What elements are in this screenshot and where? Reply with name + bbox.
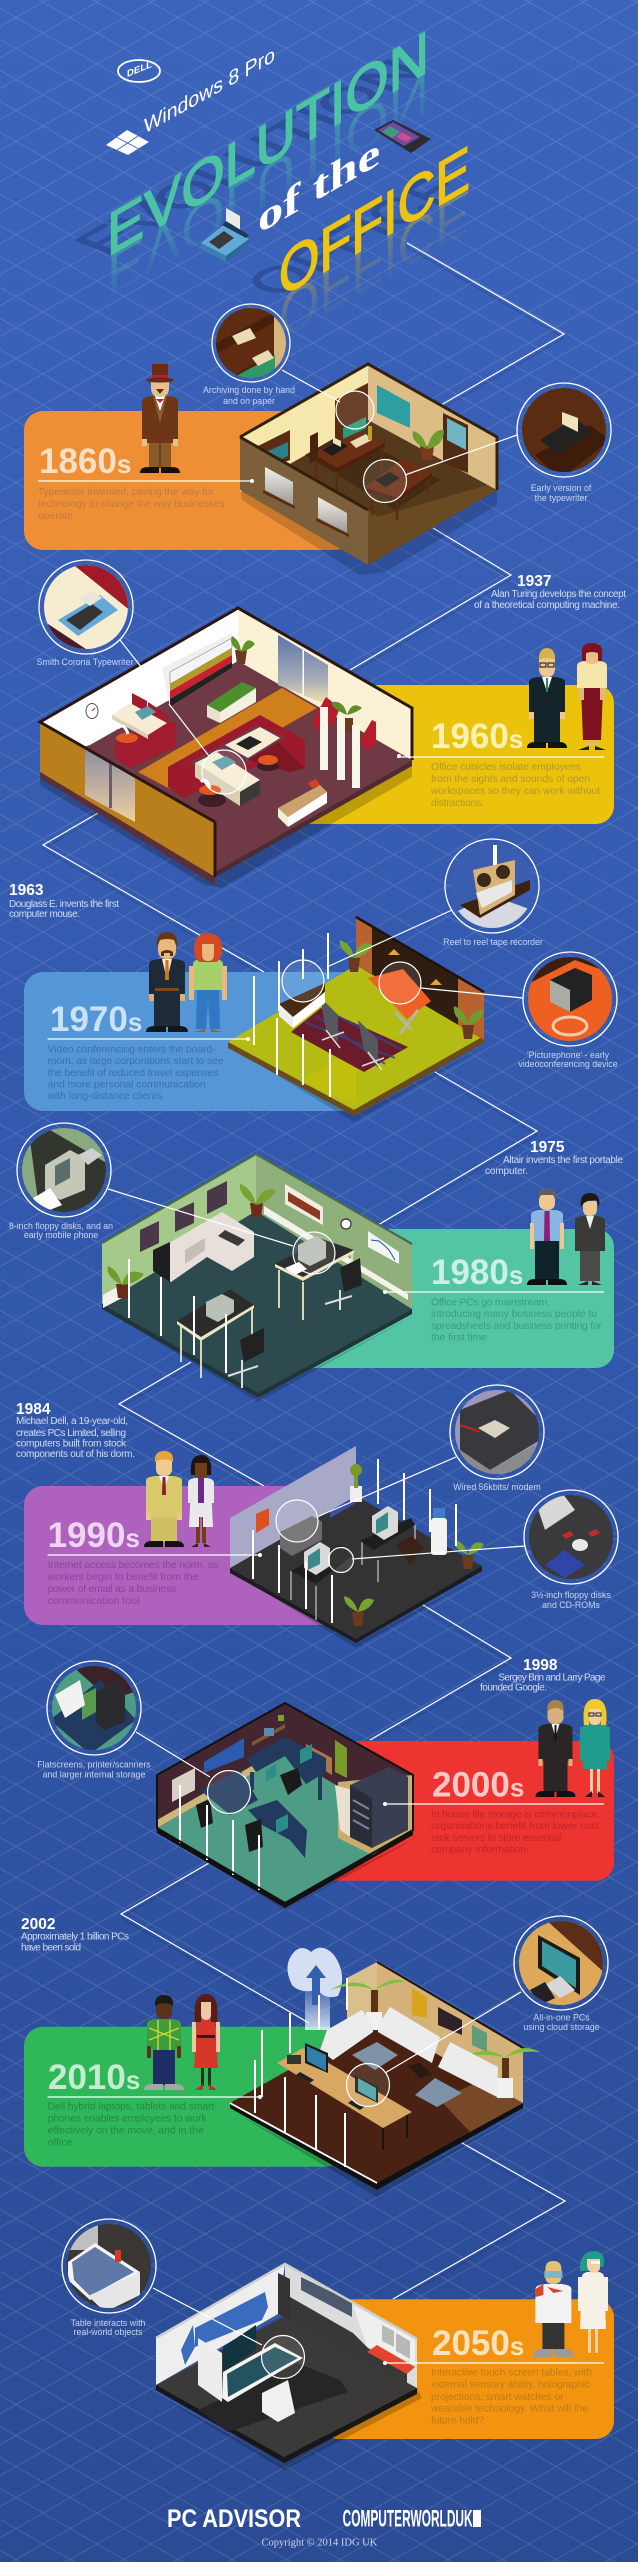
era description: office.	[48, 2137, 75, 2148]
shelf and plant	[252, 1715, 347, 1778]
timeline pointer: 1960s	[397, 754, 604, 758]
caption: Archiving done by hand	[203, 385, 295, 395]
figure: 1990s woman	[188, 1455, 214, 1547]
caption	[37, 1760, 151, 1780]
note: 1963: Douglass E. invents the first	[9, 899, 119, 910]
note: 1963: computer mouse.	[9, 909, 80, 920]
glass posts	[128, 1259, 227, 1373]
figure: 2000s woman	[580, 1699, 610, 1797]
palms	[330, 1980, 540, 2098]
era description: effectively on the move, and in the	[48, 2125, 204, 2136]
note: 1984	[16, 1401, 135, 1460]
icon: typewriter	[201, 208, 249, 262]
era description	[48, 2101, 218, 2148]
era description	[431, 1810, 600, 1856]
caption: and larger internal storage	[43, 1770, 145, 1780]
panel: 1860s	[24, 411, 354, 550]
note: 1984: components out of his dorm.	[16, 1449, 135, 1460]
note: 2002: 2002	[21, 1916, 55, 1933]
plants	[340, 940, 484, 1039]
note: 1998	[480, 1657, 606, 1694]
media cabinet	[279, 983, 325, 1028]
copier	[153, 1212, 254, 1282]
era description: power of email as a business	[48, 1584, 176, 1595]
caption: early mobile phone	[24, 1230, 98, 1240]
callout: floppy and mobile	[9, 1123, 113, 1240]
note: 2002: have been sold	[21, 1943, 81, 1954]
era description: technology to change the way businesses	[38, 499, 225, 510]
caption: Wired 56kbits/ modem	[453, 1482, 541, 1492]
cubicle middle	[168, 715, 305, 807]
plants	[344, 1464, 484, 1626]
year 2050s: 2050s	[432, 2324, 524, 2363]
note: 1984: Michael Dell, a 19-year-old,	[16, 1416, 128, 1427]
cloud and data beam	[287, 1948, 342, 2030]
lower desk	[291, 1542, 352, 1620]
note: 1984: 1984	[16, 1401, 51, 1418]
year 1980s: 1980s	[431, 1253, 523, 1292]
caption: Smith Corona Typewriter	[37, 657, 133, 667]
era description: operate	[38, 511, 73, 522]
era description: future hold?	[431, 2416, 484, 2427]
era description: Dell hybrid laptops, tablets and smart-	[48, 2101, 218, 2112]
era description: workers begin to benefit from the	[47, 1572, 198, 1583]
era description: external sensory ability, holographic	[431, 2380, 590, 2391]
era description: Interactive touch screen tables, with	[431, 2368, 592, 2379]
figure: 1990s man	[144, 1451, 184, 1547]
chairs	[320, 997, 384, 1070]
era description: rack servers to store essential	[431, 1833, 562, 1844]
era description: spreadsheets and business printing for	[431, 1321, 603, 1332]
year 1860s: 1860s	[39, 442, 131, 481]
timeline pointer: 2010s	[48, 2095, 262, 2099]
loupe and connector: 1960s	[120, 640, 246, 794]
long desk with devices	[277, 2043, 412, 2150]
era description	[430, 762, 600, 809]
note: 1975	[485, 1139, 623, 1177]
title reflections: EVOLUTION	[107, 58, 429, 312]
caption: videoconferencing device	[518, 1059, 618, 1069]
figure: 2010s man	[144, 1995, 184, 2090]
glass posts	[179, 1785, 260, 1890]
note: 1998: 1998	[523, 1657, 558, 1674]
callout: flatscreens	[37, 1661, 151, 1780]
year 2000s: 2000s	[432, 1766, 524, 1805]
title reflections: OFFICE	[279, 174, 470, 354]
caption: and CD-ROMs	[542, 1600, 600, 1610]
caption	[523, 2013, 600, 2032]
logo: Computerworld UK: COMPUTERWORLDUK	[343, 2506, 473, 2533]
callout: reel to reel	[443, 839, 543, 947]
plants	[108, 1184, 276, 1298]
office chairs	[228, 1258, 362, 1388]
caption: Flatscreens, printer/scanners	[37, 1760, 151, 1770]
glass posts	[252, 1459, 457, 1623]
year 1960s: 1960s	[431, 717, 523, 756]
era description: organisations benefit from lower cost	[431, 1821, 599, 1832]
year 1970s: 1970s	[50, 1000, 142, 1039]
figure: 1980s woman	[575, 1193, 605, 1285]
bookcases	[258, 383, 368, 470]
second desk	[365, 458, 432, 520]
era description: with long-distance clients.	[47, 1091, 165, 1102]
callout: interactive table	[62, 2219, 156, 2337]
note: 1963: 1963	[9, 882, 44, 899]
connector lines between eras	[43, 243, 565, 2303]
figure: 1860s gentleman	[140, 364, 180, 473]
figure: 1960s woman	[577, 643, 607, 750]
caption: 3½-inch floppy disks	[531, 1590, 611, 1600]
caption	[203, 385, 295, 406]
back wall	[230, 1446, 356, 1568]
wall pictures	[140, 1181, 227, 1252]
poster	[172, 1768, 195, 1802]
glass posts	[253, 933, 331, 1097]
era description: Video conferencing enters the board-	[48, 1044, 216, 1056]
room: 1860s office	[240, 364, 497, 575]
heading: OFFICE: OFFICE	[279, 132, 470, 312]
front wall with door	[40, 722, 215, 885]
era description: introducing many business people to	[431, 1309, 597, 1320]
desks and chairs	[196, 1737, 326, 1858]
logo: Dell: DELL	[127, 59, 152, 80]
note: 1975: 1975	[530, 1139, 565, 1156]
caption	[531, 483, 592, 503]
era description: Typewriter invented, paving the way for	[38, 487, 215, 498]
brick and server rack	[335, 1767, 413, 1855]
logo: Dell	[118, 59, 160, 82]
loupe and connector: 1980s	[108, 1189, 335, 1274]
clock	[86, 704, 98, 718]
figure: 1960s man	[527, 648, 567, 748]
era description	[47, 1560, 219, 1607]
room: 1970s boardroom	[228, 917, 490, 1122]
desk 1	[275, 1236, 354, 1320]
figure: 1970s woman	[189, 933, 227, 1032]
note: 1963	[9, 882, 119, 920]
back wall	[356, 917, 484, 1040]
figure: 1980s man	[527, 1188, 567, 1285]
glass posts	[254, 1978, 348, 2167]
era description: In house file storage is commonplace,	[431, 1810, 600, 1821]
figure: 1970s man	[146, 932, 188, 1032]
caption: 'Picturephone' - early	[527, 1050, 610, 1060]
era description: phones enables employees to work	[48, 2114, 207, 2125]
note: 1937: 1937	[517, 573, 551, 590]
panel: 1970s	[24, 972, 364, 1111]
window	[204, 1738, 244, 1773]
caption: Reel to reel tape recorder	[443, 937, 543, 947]
note: 2002	[21, 1916, 129, 1954]
callout: modem	[450, 1385, 544, 1492]
futuristic chair	[262, 2380, 295, 2422]
timeline pointer: 1990s	[48, 1553, 262, 1557]
era description: room, as large corporations start to see	[48, 1056, 224, 1067]
loupe and connector: 2000s	[136, 1732, 250, 1814]
heading: EVOLUTION: EVOLUTION	[107, 17, 429, 270]
callout: typewriter	[517, 383, 611, 503]
timeline pointer: 1860s	[38, 479, 254, 483]
footer logos and copyright	[167, 2505, 481, 2549]
cubicle left	[112, 693, 176, 768]
caption	[9, 1221, 113, 1240]
panel: 1960s	[290, 685, 614, 824]
note: 1937: of a theoretical computing machine.	[474, 600, 620, 611]
plant	[231, 636, 255, 664]
water cooler	[431, 1508, 447, 1555]
front wall with windows	[240, 437, 368, 565]
timeline pointer: 1970s	[48, 1037, 250, 1041]
partition and table	[198, 2325, 303, 2402]
caption: 8-inch floppy disks, and an	[9, 1221, 113, 1231]
planter	[207, 682, 256, 723]
callout: Smith Corona typewriter	[37, 560, 133, 667]
coffee tables and side table	[352, 2042, 462, 2107]
panel: 2010s	[24, 2027, 344, 2167]
loupe and connector: 2010s	[346, 1992, 521, 2106]
caption: real-world objects	[74, 2327, 143, 2337]
room: 2010s office	[230, 1948, 540, 2197]
era description	[47, 1044, 224, 1102]
era description: Office PCs go mainstream,	[431, 1298, 550, 1308]
figure: 2010s woman	[192, 1994, 220, 2090]
room: 1990s office	[230, 1446, 488, 1648]
reception desk	[278, 779, 327, 827]
picture	[306, 1744, 332, 1775]
logo: Windows 8 Pro	[106, 42, 275, 155]
era description	[430, 2368, 592, 2427]
era description: from the sights and sounds of open	[431, 774, 590, 785]
caption	[518, 1050, 618, 1069]
reception desk	[280, 1516, 322, 1556]
painting, clock and chart	[285, 1184, 399, 1264]
era description: and more personal communication	[48, 1080, 206, 1090]
caption: Early version of	[531, 483, 592, 493]
era description	[38, 487, 225, 522]
era description: workspaces so they can work without	[430, 786, 600, 797]
panel: 2000s	[320, 1741, 614, 1881]
caption	[71, 2318, 146, 2337]
note: 1975: computer.	[485, 1166, 528, 1177]
icon: tablet hybrid	[374, 120, 431, 153]
caption: using cloud storage	[523, 2022, 600, 2032]
era description: communication tool	[48, 1596, 140, 1607]
room: 2000s office	[157, 1703, 420, 1910]
filing cabinets	[162, 633, 232, 707]
panel: 2050s	[320, 2299, 614, 2439]
era description: Office cubicles isolate employees	[431, 762, 581, 773]
plant	[413, 430, 444, 460]
title: Evolution of the Office	[60, 17, 482, 354]
panel: 1980s	[290, 1229, 614, 1368]
room: 1980s office	[102, 1154, 415, 1402]
conference table	[368, 969, 431, 1034]
note: 1998: Sergey Brin and Larry Page	[498, 1673, 606, 1684]
room: 2050s office	[156, 2264, 422, 2470]
note: 2002: Approximately 1 billion PCs	[21, 1931, 129, 1942]
era description: distractions.	[431, 798, 484, 809]
left wall with windows	[156, 2264, 285, 2385]
note: 1975: Altair invents the first portable	[503, 1155, 623, 1166]
figure: 2050s woman	[578, 2251, 608, 2353]
logo: Computerworld UK	[343, 2506, 481, 2533]
red chairs and plant	[312, 697, 376, 750]
desk with typewriter	[312, 426, 385, 495]
chair	[310, 432, 318, 464]
glass door	[278, 635, 328, 705]
loupes: 1990s	[276, 1457, 525, 1572]
sofas	[320, 2007, 498, 2097]
logo: PC Advisor: PC ADVISOR	[167, 2505, 301, 2533]
map on wall	[377, 385, 410, 428]
callout: floppy and CD-ROM	[524, 1490, 618, 1610]
panel: 1990s	[24, 1486, 344, 1625]
room: 1960s office	[40, 608, 412, 888]
timeline pointer: 2000s	[383, 1802, 604, 1806]
era description: Internet access becomes the norm, as	[48, 1560, 219, 1571]
caption: Table interacts with	[71, 2318, 146, 2328]
callout: all-in-one PCs	[514, 1916, 608, 2032]
rug	[291, 1008, 408, 1072]
loupe and connector: 2050s	[153, 2288, 304, 2378]
caption: the typewriter	[535, 493, 587, 503]
note: 1937	[474, 573, 626, 611]
columns	[320, 707, 360, 788]
desk with monitor	[360, 1506, 424, 1582]
note: 1998: founded Google.	[480, 1683, 547, 1694]
timeline pointer: 1980s	[383, 1290, 604, 1294]
title shadows: EVOLUTION	[60, 53, 441, 262]
era description	[431, 1298, 603, 1344]
era description: company information.	[431, 1845, 529, 1856]
caption: All-in-one PCs	[533, 2013, 590, 2023]
era description: the first time	[431, 1332, 487, 1344]
note: 1984: computers built from stock	[16, 1438, 127, 1450]
heading: of the: of the	[258, 127, 380, 243]
right wall	[278, 2264, 417, 2388]
year 2010s: 2010s	[48, 2058, 140, 2097]
callout: archiving	[203, 304, 295, 406]
figure: 2050s man	[533, 2261, 573, 2357]
era description: projections, smart watches or	[431, 2392, 564, 2403]
caption	[531, 1590, 611, 1610]
logo: Windows 8 Pro: Windows 8 Pro	[144, 42, 275, 139]
title shadows: OFFICE	[230, 169, 482, 303]
figure: 2000s man	[536, 1700, 576, 1797]
loupes: 1860s	[282, 370, 517, 502]
desk 2	[177, 1289, 254, 1378]
note: 1984: creates PCs Limited, selling	[16, 1428, 126, 1439]
copyright: Copyright © 2014 IDG UK	[261, 2538, 378, 2549]
timeline pointer: 2050s	[383, 2361, 604, 2365]
era description: the benefit of reduced travel expenses	[48, 1068, 219, 1079]
callout: picturephone	[518, 952, 618, 1069]
note: 1937: Alan Turing develops the concept	[491, 589, 626, 600]
loupes: 1970s	[282, 910, 523, 1004]
door and poster	[443, 413, 468, 473]
era description: wearable technology. What will the	[430, 2404, 588, 2415]
caption: and on paper	[223, 396, 275, 406]
orange floor strip	[138, 688, 317, 790]
year 1990s: 1990s	[48, 1516, 140, 1555]
brick wall	[347, 1962, 523, 2103]
